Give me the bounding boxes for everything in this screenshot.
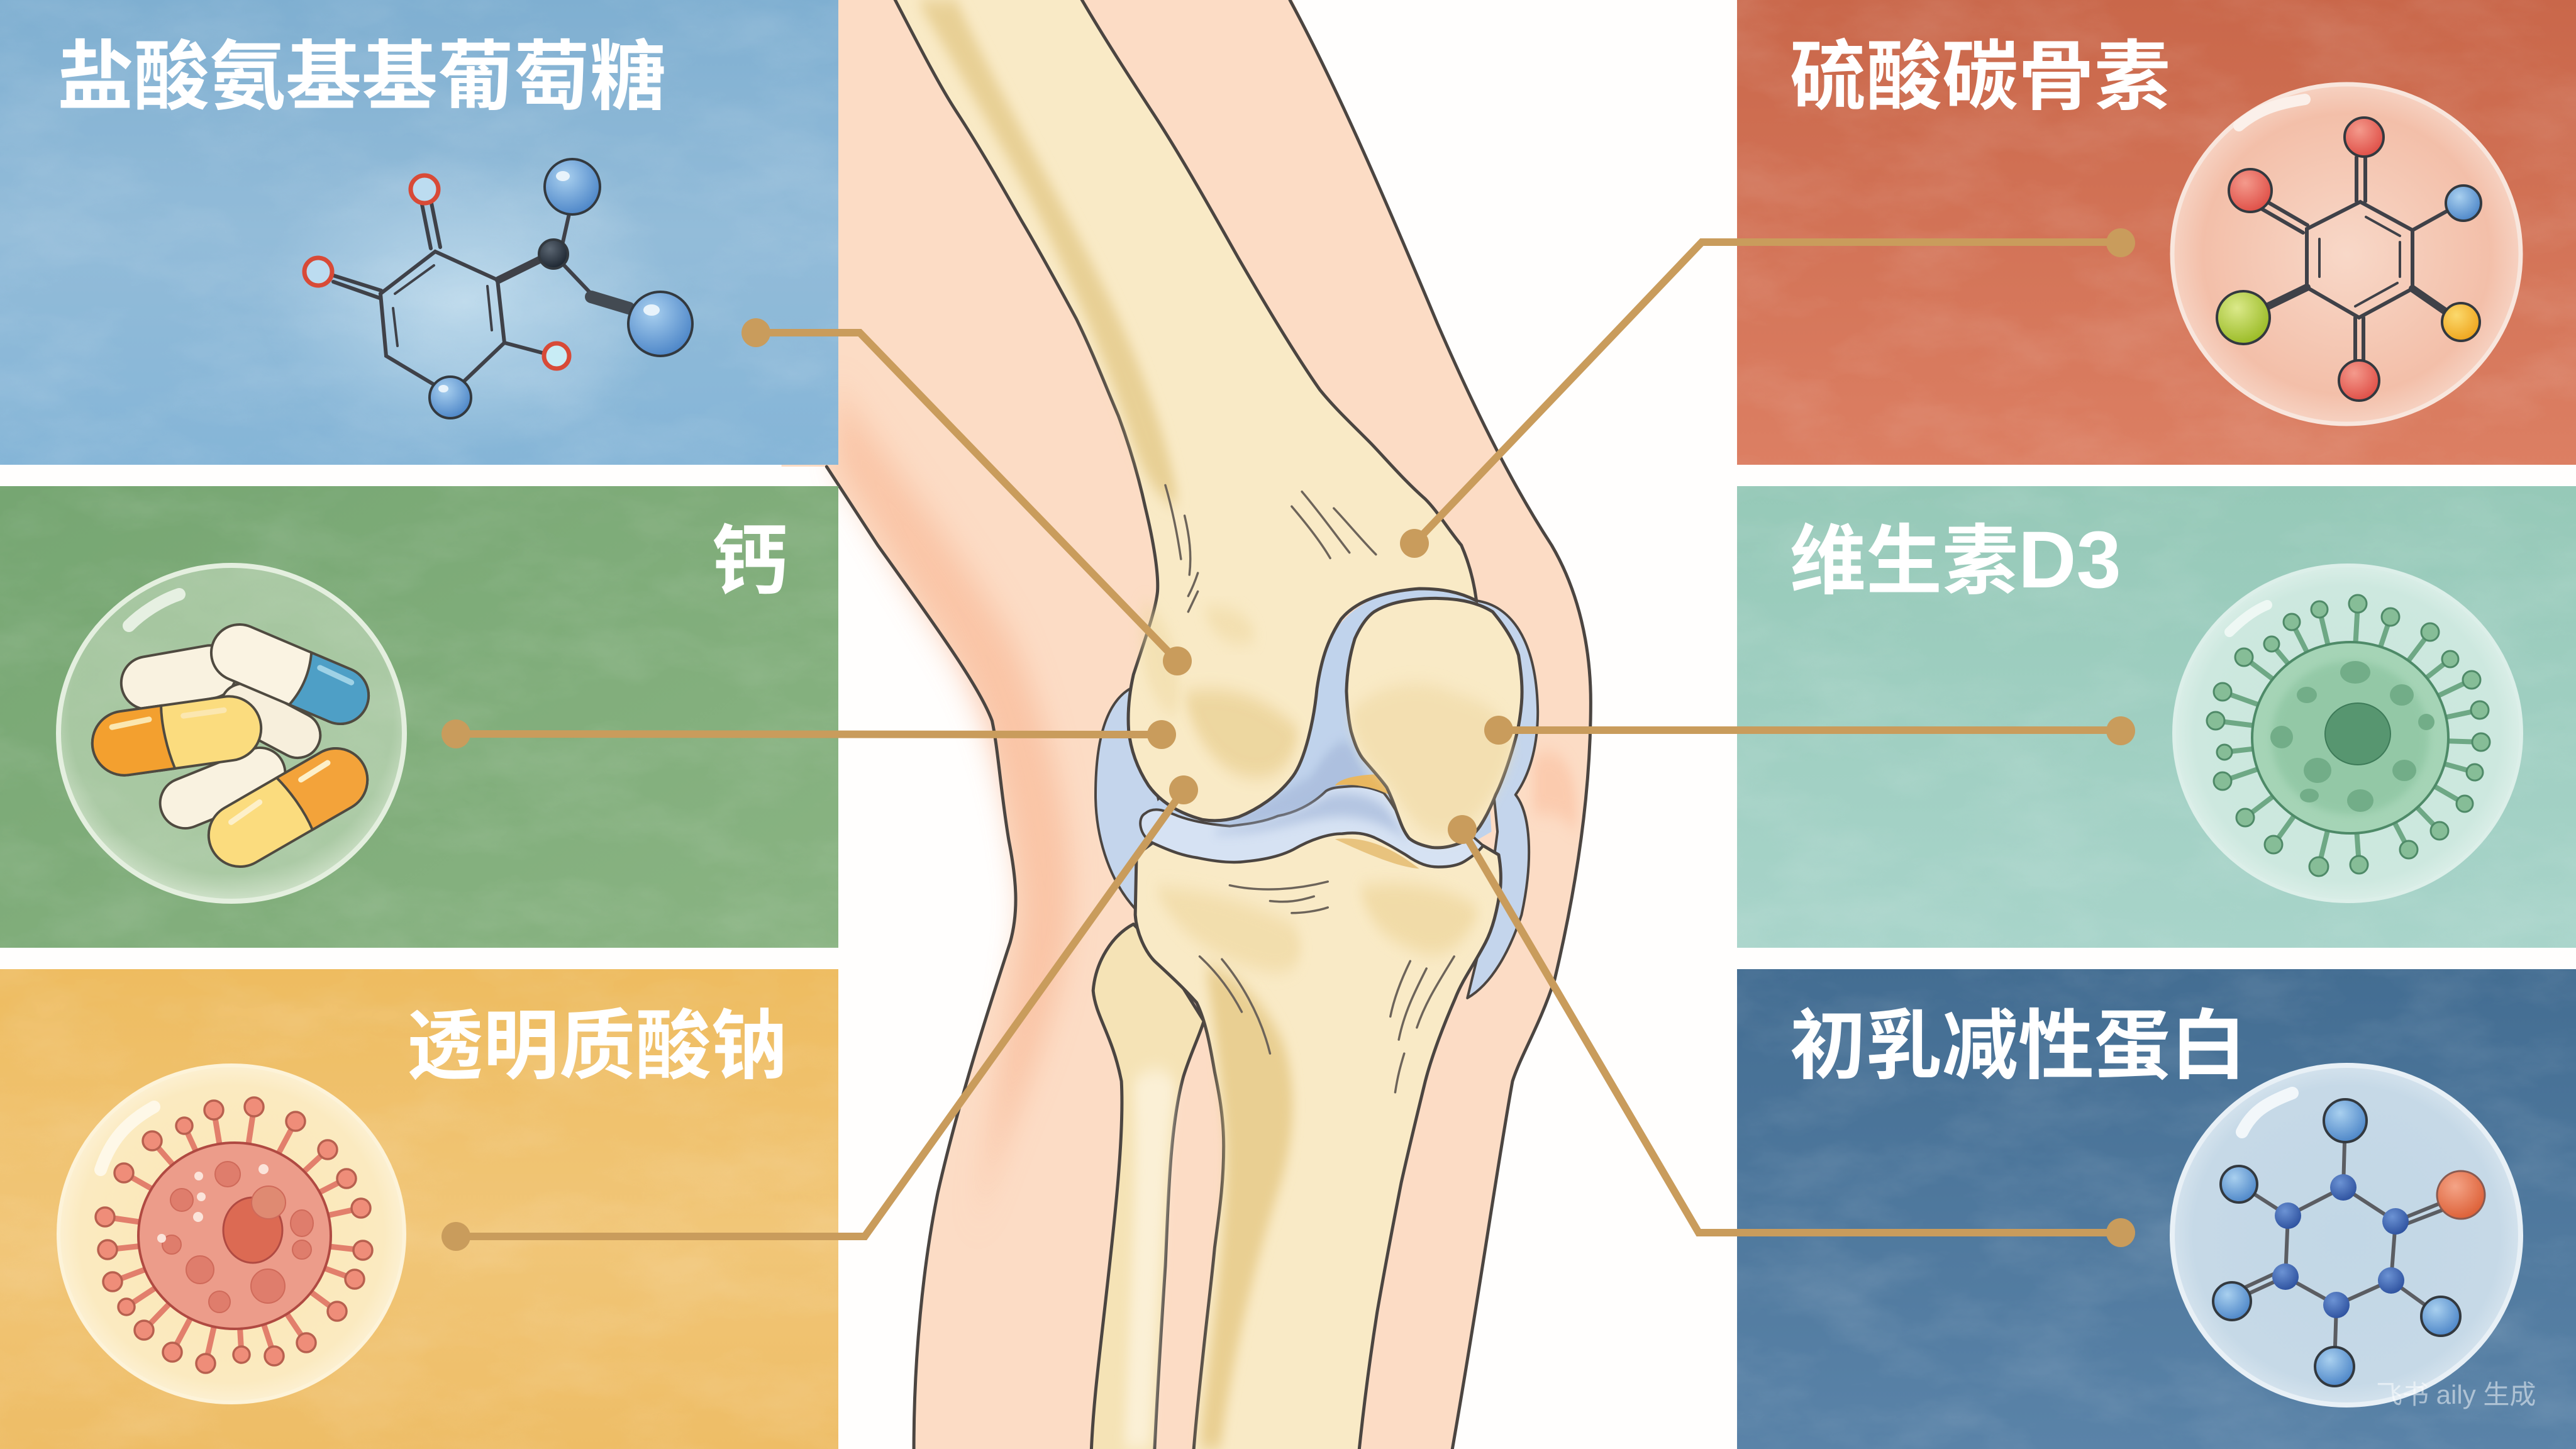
molecule glow — [258, 151, 673, 453]
cell body — [138, 1143, 331, 1329]
panel: calcium — [0, 486, 838, 948]
tibial plateau tint — [1335, 838, 1419, 869]
orange cartilage patch — [1335, 774, 1389, 795]
capsule: orange and yellow — [88, 692, 265, 779]
tibia — [1135, 833, 1501, 1449]
oxygen rings — [411, 175, 438, 203]
femur texture lines — [1165, 485, 1376, 612]
meniscus band — [1140, 774, 1483, 869]
hexagon — [2307, 202, 2412, 318]
connector: sodium hyaluronate — [441, 775, 1198, 1251]
knee cap skin tint — [1533, 752, 1577, 831]
icon: chondroitin molecule bubble — [2172, 84, 2521, 424]
title: lactoferrin: 初乳减性蛋白 — [1790, 1003, 2246, 1089]
cartilage — [1096, 589, 1538, 998]
capsule: middle — [213, 675, 328, 766]
left cartilage — [1096, 689, 1167, 910]
bubble highlight — [129, 594, 179, 626]
title: sodium hyaluronate: 透明质酸钠 — [407, 1003, 787, 1089]
icon: green virus bubble — [2174, 565, 2521, 901]
title: chondroitin: 硫酸碳骨素 — [1790, 34, 2170, 119]
panel: lactoferrin — [1737, 969, 2576, 1449]
knee illustration — [782, 0, 1591, 1449]
spike tips — [96, 1097, 372, 1373]
cartilage shade — [1209, 741, 1419, 860]
icon: red virus bubble — [58, 1065, 404, 1402]
cell body — [2252, 642, 2448, 833]
patella — [1346, 598, 1522, 848]
leg outlines — [1290, 0, 1591, 1449]
connector: calcium — [441, 719, 1176, 749]
panel: chondroitin sulfate — [1737, 0, 2576, 465]
skin shading — [836, 388, 1071, 1229]
spikes — [2216, 604, 2481, 867]
capsule: back left — [117, 641, 241, 714]
capsule: white and blue — [203, 616, 377, 733]
atoms — [2345, 118, 2384, 157]
central cartilage — [1140, 589, 1492, 874]
ring atoms — [2330, 1174, 2357, 1201]
tibia shadow — [1200, 966, 1292, 1449]
panel: glucosamine — [0, 0, 838, 465]
spike tips — [2207, 595, 2490, 876]
specks — [157, 1164, 269, 1243]
atoms — [539, 240, 568, 269]
atom highlights — [438, 171, 660, 392]
femur condyle shade — [1185, 690, 1299, 777]
connector: glucosamine — [741, 318, 1192, 675]
bubble highlight — [101, 1107, 154, 1170]
icon: capsules bubble — [58, 565, 404, 901]
outer atoms — [2324, 1099, 2367, 1142]
connector: chondroitin — [1400, 228, 2135, 558]
organelles — [162, 1162, 313, 1313]
title: vitamin D3: 维生素D3 — [1790, 515, 2121, 605]
icon: glucosamine molecule — [304, 159, 692, 418]
bubble highlight — [2242, 1093, 2292, 1132]
connector: lactoferrin — [1448, 815, 2135, 1247]
femur — [893, 0, 1477, 821]
capsule: yellow and orange — [197, 737, 379, 878]
tibia texture lines — [1200, 882, 1454, 1092]
capsule: lower white — [153, 740, 292, 836]
watermark: 飞书 aily 生成 — [2376, 1380, 2536, 1409]
bubble highlight — [2229, 605, 2267, 632]
panel: sodium hyaluronate — [0, 969, 838, 1449]
panel: vitamin D3 — [1737, 486, 2576, 948]
icon: lactoferrin molecule bubble — [2172, 1065, 2521, 1405]
leg skin — [782, 0, 1591, 1449]
back of leg outline — [826, 467, 1016, 1449]
title: glucosamine: 盐酸氨基基葡萄糖 — [57, 34, 666, 119]
organelles — [2270, 661, 2434, 812]
right cartilage — [1467, 601, 1538, 998]
spikes — [105, 1107, 363, 1363]
bubble highlight — [2239, 99, 2305, 126]
ring bonds — [2285, 1187, 2396, 1305]
fibula — [1091, 924, 1204, 1449]
title: calcium: 钙 — [711, 518, 787, 604]
connector: vitamin D3 — [1484, 716, 2135, 745]
femur shaft shadow — [917, 0, 1179, 504]
